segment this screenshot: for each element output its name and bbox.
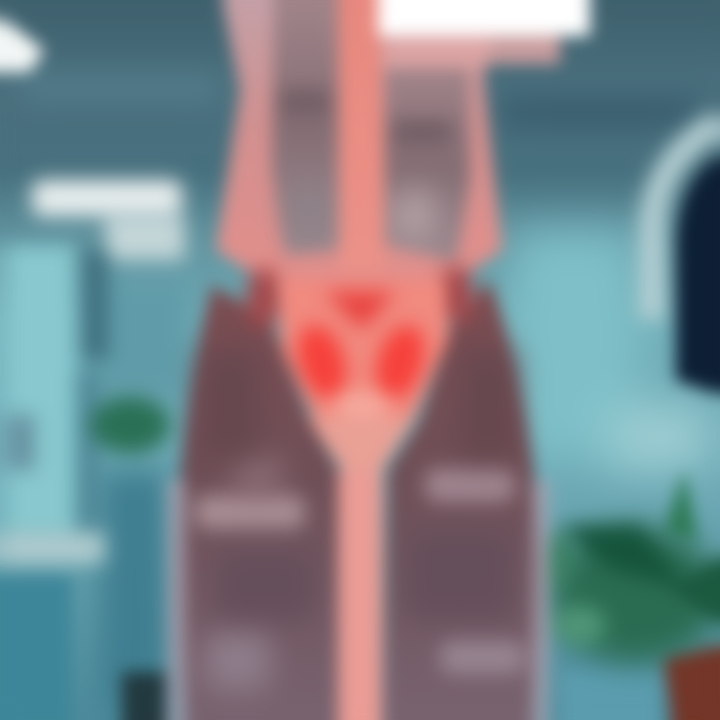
left wall panels bbox=[0, 245, 166, 720]
torso bbox=[216, 0, 502, 285]
plant pot bbox=[664, 645, 720, 720]
right arch bbox=[652, 122, 720, 320]
leg haze and muscle highlights bbox=[166, 350, 550, 720]
abdominal muscles bbox=[272, 0, 470, 262]
legs base bbox=[176, 280, 542, 720]
ceiling light: top left bbox=[0, 16, 44, 72]
right dark doorway bbox=[676, 155, 720, 395]
pelvis bbox=[278, 280, 448, 478]
ceiling light: top window bbox=[378, 0, 590, 64]
hip joints bbox=[246, 266, 474, 328]
right plant bbox=[546, 470, 720, 663]
figure bbox=[166, 0, 550, 720]
central spine bbox=[338, 0, 384, 270]
left plant bbox=[90, 397, 170, 453]
ceiling light: left panel bbox=[32, 180, 185, 260]
central lower strip bbox=[338, 472, 382, 720]
